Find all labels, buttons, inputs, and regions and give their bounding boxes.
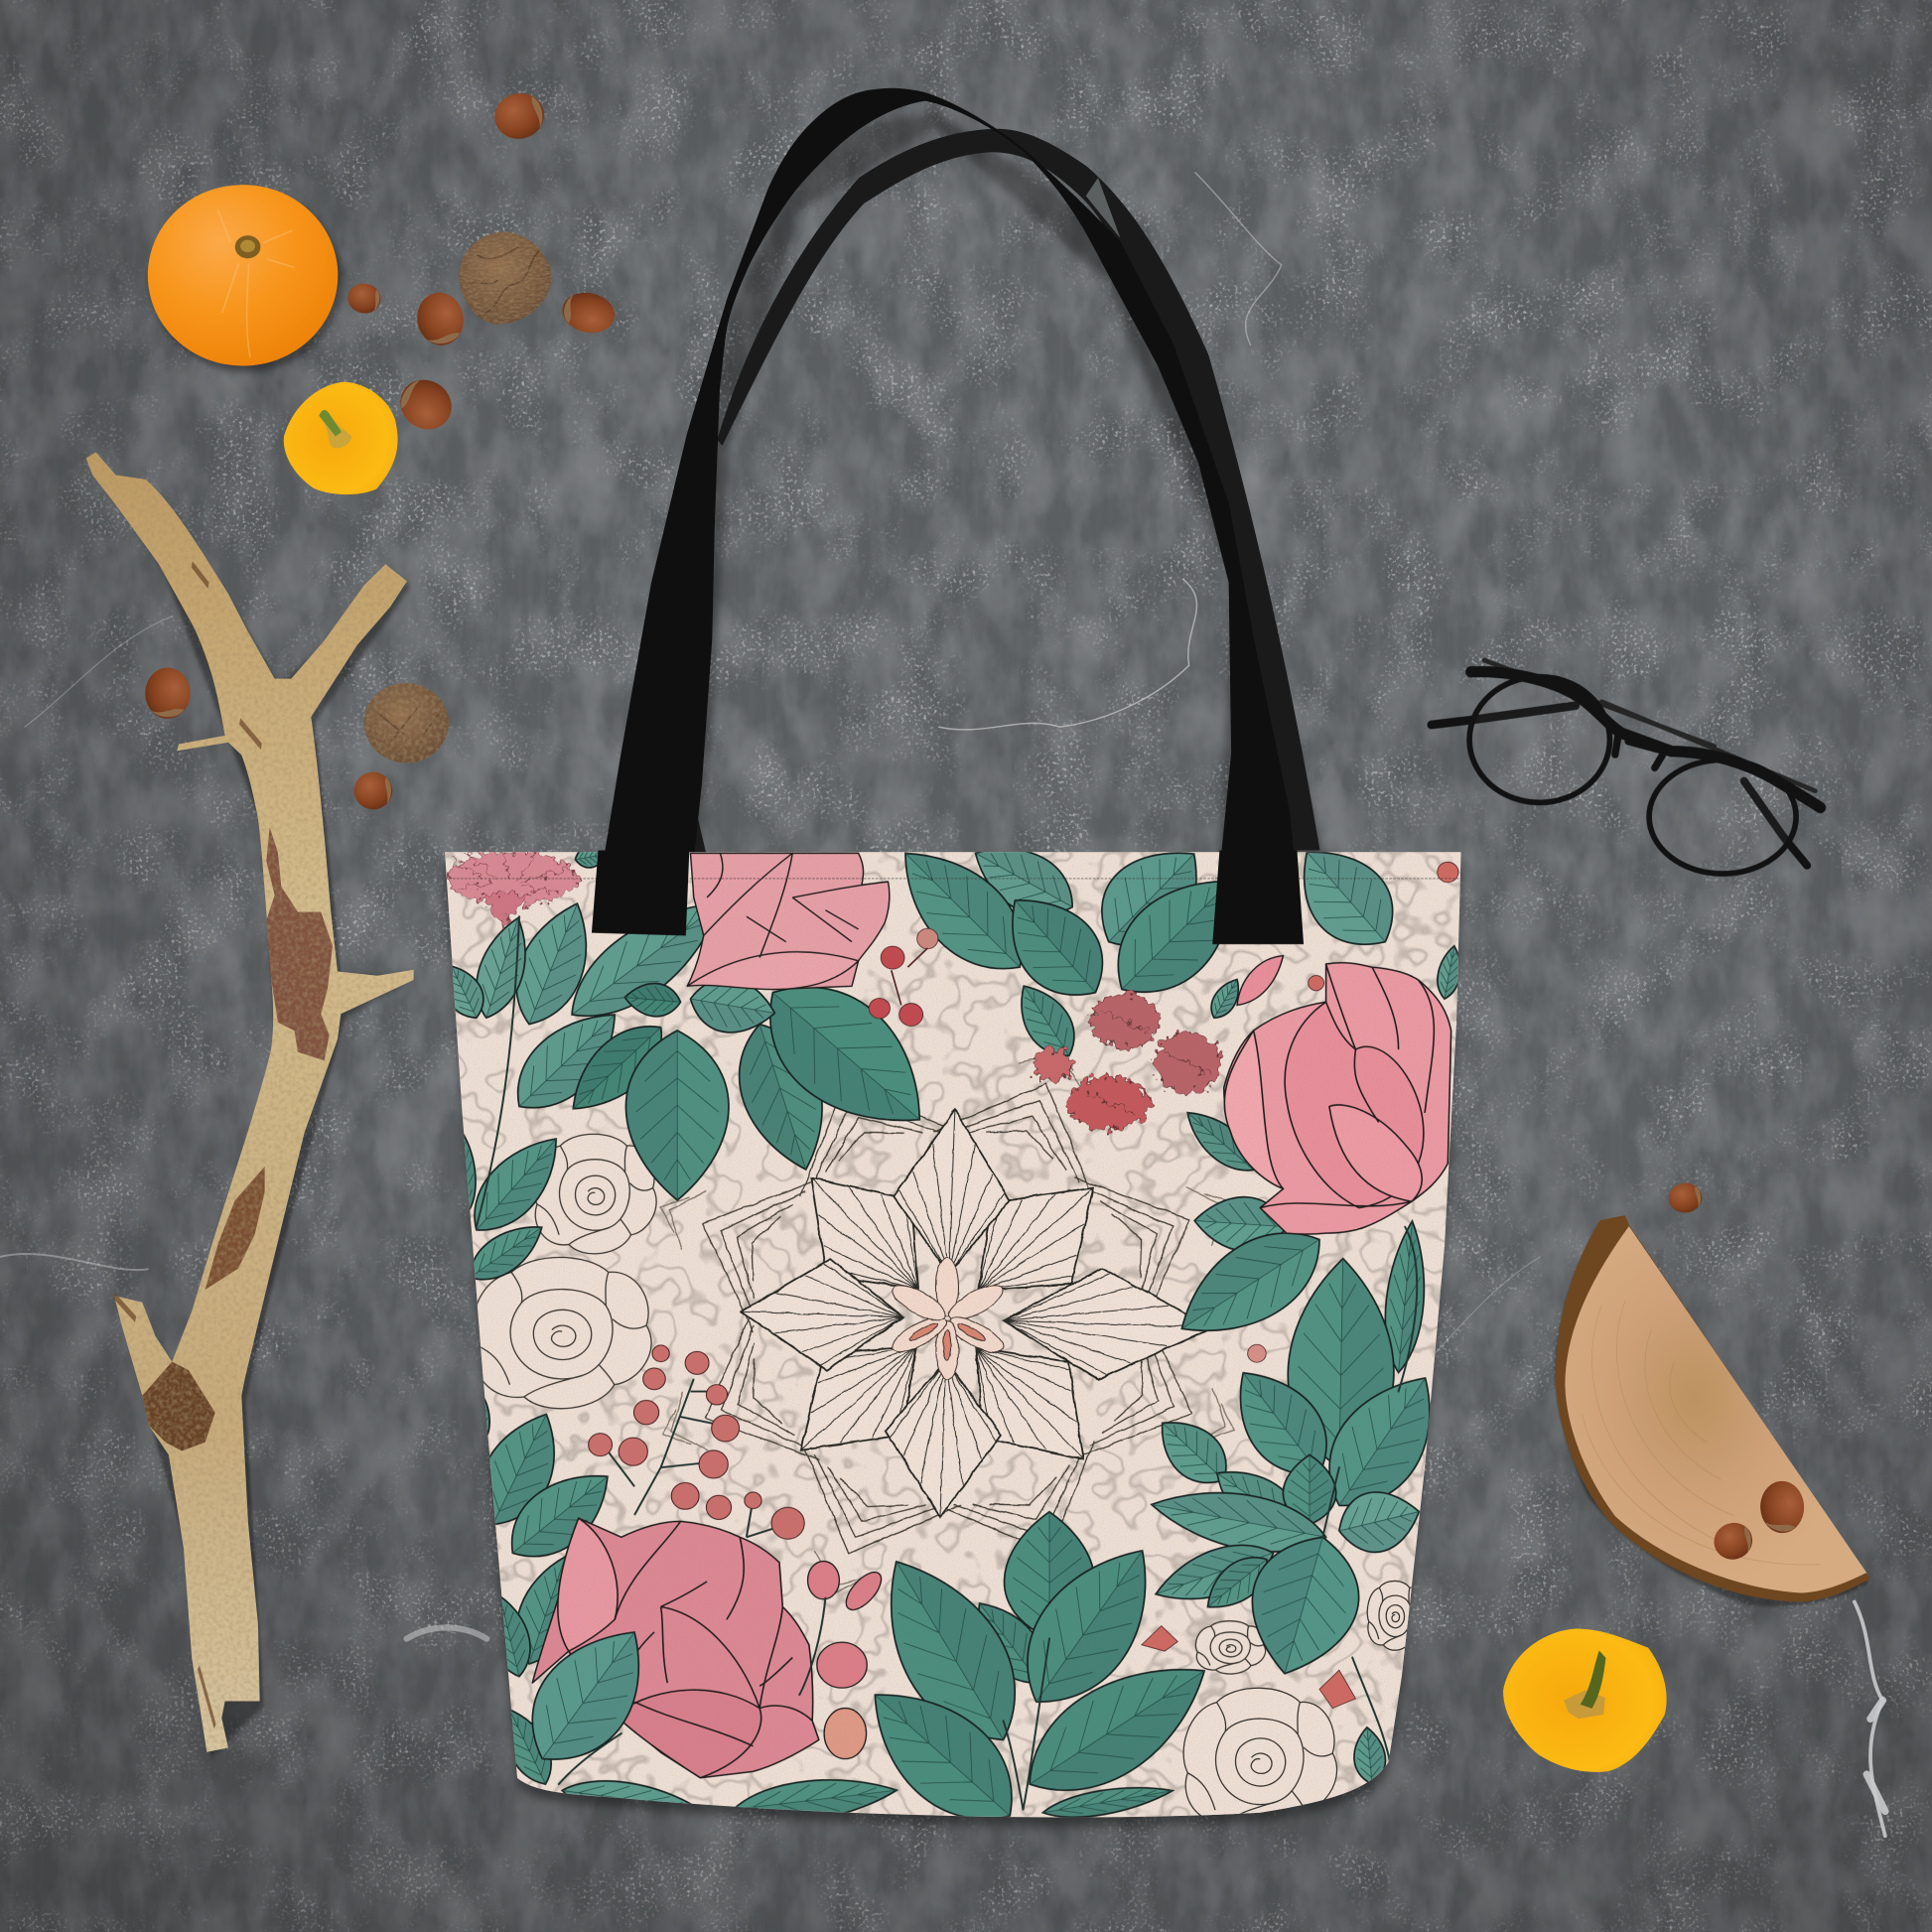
teal leaves: top left [436,844,740,1292]
small hazelnut above wood [1668,1181,1704,1214]
hazelnut small [354,772,392,809]
top hem stitching [445,878,1461,880]
nuts by branch [145,668,449,809]
small hazelnut on wood [1713,1521,1753,1562]
branch shadow [90,464,418,1757]
left lens [1469,677,1609,802]
squash body [1503,1628,1667,1772]
teal leaves: lower left [464,1391,627,1792]
orange pumpkin, hazelnuts, walnut and yellow squash group [148,88,619,494]
bag handle strap ends over bag [592,850,1304,944]
small red blooms: lower right [1142,862,1458,1709]
teal leaves: right side [1145,1100,1460,1785]
pink spiky flower: top left [448,850,577,926]
mandala star kites [739,1108,1214,1519]
teal leaves: bottom centre [560,1512,1230,1848]
yellow squash large [1503,1628,1667,1772]
pink flower: right peony [1224,963,1451,1234]
pink buds: bottom [799,1562,888,1759]
berry stems [609,1379,786,1537]
mandala outer chevrons [659,1054,1235,1593]
berry sprig [589,1345,804,1539]
hazelnut on wood [1757,1477,1807,1537]
canvas background [437,834,1469,1827]
back handle strap [688,129,1319,853]
walnut [459,231,551,325]
gap between crossing straps [1086,178,1120,238]
yellow squash small [284,382,398,494]
soft handle shadow [591,110,1324,948]
wooden half-disc and objects [1555,1215,1869,1606]
teal leaves: centre-left cluster [555,955,955,1200]
wood bark rim [1556,1215,1869,1602]
hazelnut middle [413,289,468,348]
ink scribbles on canvas [437,834,1469,1827]
mandala [659,1054,1235,1593]
branch [86,452,418,1757]
hazelnut [145,668,191,719]
branch wood [86,452,414,1752]
hazelnut small [345,281,383,316]
teal leaves: top centre [878,826,1261,1067]
top frame and bridge [1471,671,1820,807]
wood shadow [1555,1224,1868,1606]
bag shadow [445,861,1461,1826]
eyeglasses [1432,660,1820,874]
bark patch upper [266,827,333,1060]
hazelnut [490,88,548,143]
squash blossom scar [1564,1690,1605,1719]
mandala centre flower [887,1258,1008,1379]
orange pumpkin [148,185,343,372]
bark patch lower [142,1362,215,1450]
leaf over bottom peony [505,1607,671,1784]
berries [589,1345,804,1539]
bag handles [591,88,1324,948]
front handle strap [592,88,1304,944]
pink flower: top [687,853,890,989]
hazelnut lower [391,370,462,439]
walnut [364,683,449,762]
squash stem [1581,1650,1605,1709]
stems [477,916,1417,1810]
right strap end [1212,850,1304,944]
teal leaves: top right [1204,828,1465,1023]
red sprig: top centre [869,928,938,1026]
frame bridge lower [1615,735,1665,767]
line-art roses [473,1134,1423,1833]
pink flower: bottom peony [532,1518,819,1778]
tote bag body [436,826,1469,1848]
wood rings [1582,1302,1820,1565]
hazelnut right [559,288,619,338]
left strap end [592,850,689,935]
bark patch middle [206,1167,265,1290]
right lens [1649,759,1796,874]
bark streaks [114,564,261,1726]
wood slice [1565,1226,1866,1593]
red flower cluster [1033,995,1220,1130]
canvas weave texture [437,834,1469,1827]
pink bud: right [1237,956,1283,1005]
folded temple arms [1432,660,1815,866]
